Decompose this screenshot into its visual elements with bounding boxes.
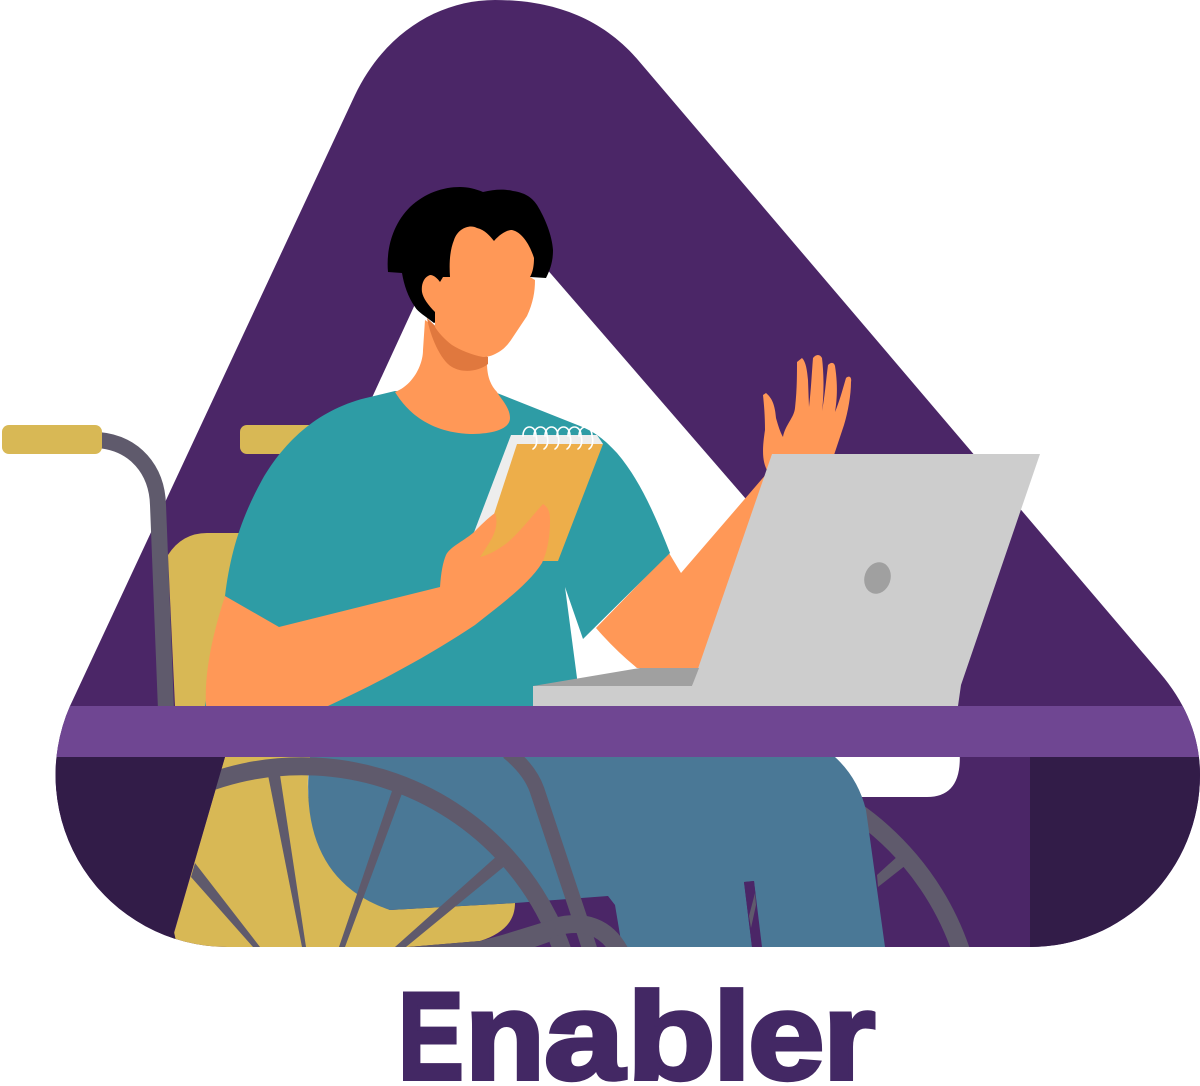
left wheel [191, 757, 570, 947]
purple floor piece [480, 896, 622, 947]
wheelchair back handle [240, 425, 320, 454]
dark left panel [56, 757, 225, 939]
notebook [473, 427, 603, 561]
lower wheelchair and legs [56, 757, 1200, 947]
person [205, 187, 851, 706]
gap between legs [744, 881, 762, 947]
notebook spiral rings [523, 427, 593, 449]
title [398, 968, 876, 1086]
forearm and hand holding notebook [206, 504, 550, 706]
desk bar [50, 706, 1200, 757]
laptop keyboard [533, 668, 699, 686]
right wheel [865, 806, 970, 947]
laptop logo [860, 559, 895, 597]
blue trousers [308, 757, 885, 947]
yellow wheelchair seat [170, 757, 515, 947]
dark right panel [1030, 757, 1200, 949]
raised hand [763, 355, 851, 472]
caster wheel [555, 924, 620, 952]
hair [388, 187, 553, 323]
teal shirt [205, 391, 670, 706]
neck shadow [427, 318, 488, 371]
face [422, 226, 535, 357]
wheelchair frame [98, 440, 166, 710]
spoke in leg gap [749, 893, 756, 928]
wheelchair front handle [2, 425, 102, 454]
notebook cover [473, 435, 603, 535]
inner white triangle [230, 200, 960, 797]
notebook page [480, 444, 603, 561]
laptop [533, 454, 1040, 706]
neck [395, 320, 510, 434]
footrest bar [408, 923, 549, 947]
raised arm [596, 460, 775, 672]
wheelchair backrest [168, 533, 260, 706]
wheelchair frame strut [508, 752, 590, 950]
laptop body and screen [533, 454, 1040, 706]
